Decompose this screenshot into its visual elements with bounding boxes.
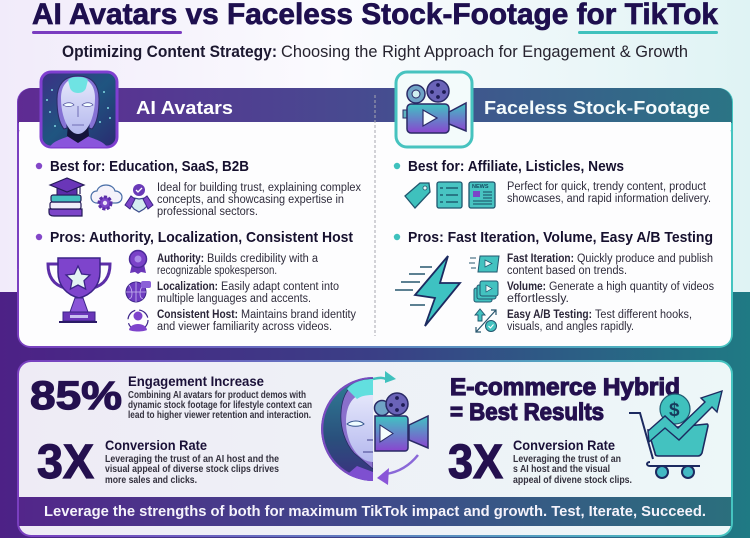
- text: conversion rate right: [513, 437, 632, 486]
- text: engagement increase: Combining AI avatars for product demos with: [128, 390, 306, 401]
- text: consistent host: Consistent Host:: [157, 309, 238, 321]
- icon: numbered list: [437, 182, 462, 208]
- heading: Faceless Stock-Footage: Faceless Stock-Footage: [484, 98, 710, 118]
- icon: trophy: [48, 258, 110, 323]
- subtitle: Choosing the Right Approach for Engagement & Growth: [281, 43, 688, 61]
- text: conversion rate right: appeal of divene stock clips.: [513, 475, 632, 486]
- heading: AI Avatars: AI Avatars: [136, 98, 233, 118]
- text: conversion rate right: Conversion Rate: [513, 437, 615, 453]
- text: localization: Localization:: [157, 281, 218, 293]
- icon: hybrid avatar and camera: [321, 371, 428, 485]
- text: authority: [157, 253, 319, 277]
- text: faceless best for description: showcases, and rapid information delivery.: [507, 193, 711, 205]
- section: faceless best for: Best for: Affiliate, Listicles, News: [408, 158, 624, 175]
- text: conversion rate left: visual appeal of diverse stock clips drives: [105, 464, 279, 475]
- text: volume: Volume:: [507, 281, 546, 293]
- text: fast iteration: [507, 253, 713, 277]
- icon: newspaper: NEWS: [472, 184, 489, 190]
- icon: A/B testing: [475, 309, 496, 332]
- text: engagement increase: lead to higher viewer retention and interaction.: [128, 410, 311, 421]
- icon: AI avatar: [41, 72, 117, 147]
- text: easy A/B testing: Easy A/B Testing:: [507, 309, 592, 321]
- text: conversion rate left: [105, 437, 279, 486]
- text: conversion rate left: Conversion Rate: [105, 437, 207, 453]
- heading: e-commerce hybrid: E-commerce Hybrid: [450, 374, 680, 401]
- section: faceless pros: Pros: Fast Iteration, Volume, Easy A/B Testing: [408, 229, 713, 246]
- banner: [19, 497, 731, 526]
- icon: fast video: [469, 256, 499, 272]
- icon: handshake: [125, 184, 153, 212]
- panel: comparison: [17, 72, 733, 348]
- text: AI best for description: professional sectors.: [157, 206, 258, 218]
- section: AI pros: Pros: Authority, Localization, Consistent Host: [50, 229, 353, 246]
- text: engagement increase: dynamic stock footage for lifestyle context can: [128, 400, 312, 411]
- text: consistent host: and viewer familiarity across videos.: [157, 321, 332, 333]
- icon: consistent host: [128, 310, 148, 332]
- text: easy A/B testing: Test different hooks,: [595, 309, 692, 321]
- text: authority: Builds credibility with a: [207, 253, 319, 265]
- text: faceless best for description: [507, 181, 711, 205]
- icon: stacked videos: [474, 281, 498, 302]
- text: volume: Generate a high quantity of videos: [549, 281, 714, 293]
- stat: 85%: 85%: [30, 374, 122, 418]
- text: fast iteration: Fast Iteration:: [507, 253, 574, 265]
- text: AI best for description: concepts, and showcasing expertise in: [157, 194, 344, 206]
- icon: cloud gear: [91, 185, 122, 209]
- icon: video camera: [396, 72, 472, 147]
- subtitle: Optimizing Content Strategy:: [62, 43, 277, 61]
- section: AI best for: Best for: Education, SaaS, B2B: [50, 158, 249, 175]
- text: engagement increase: Engagement Increase: [128, 373, 264, 389]
- icon: authority badge: [130, 250, 146, 274]
- icon: lightning bolt: [395, 256, 460, 326]
- header bar: [18, 88, 732, 123]
- text: easy A/B testing: visuals, and angles rapidly.: [507, 321, 634, 333]
- icon: shopping cart with rising arrow: [629, 391, 722, 478]
- panel: results: [17, 360, 733, 537]
- text: engagement increase: [128, 373, 312, 421]
- stat: 3X left: 3X: [37, 436, 94, 489]
- icon: graduation books: [49, 178, 84, 216]
- text: faceless best for description: Perfect for quick, trendy content, product: [507, 181, 707, 193]
- text: localization: Easily adapt content into: [221, 281, 339, 293]
- icon: price tag: [405, 183, 430, 208]
- text: conversion rate right: Leveraging the trust of an: [513, 454, 621, 465]
- banner: Leverage the strengths of both for maximum TikTok impact and growth. Test, Iterate, Succeed.: [44, 503, 706, 520]
- text: consistent host: Maintains brand identity: [241, 309, 356, 321]
- text: easy A/B testing: [507, 309, 692, 333]
- text: fast iteration: Quickly produce and publish: [577, 253, 713, 265]
- subtitle: [62, 43, 688, 61]
- text: authority: Authority:: [157, 253, 204, 265]
- icon: globe: [126, 281, 151, 302]
- icon: shopping cart with rising arrow: $: [669, 400, 680, 421]
- text: authority: recognizable spokesperson.: [157, 265, 277, 277]
- heading: e-commerce hybrid: [450, 374, 680, 426]
- icon: newspaper: [469, 182, 495, 208]
- text: fast iteration: content based on trends.: [507, 265, 627, 277]
- text: conversion rate left: more sales and clicks.: [105, 475, 197, 486]
- text: volume: effortlessly.: [507, 293, 569, 305]
- text: conversion rate left: Leveraging the trust of an AI host and the: [105, 454, 279, 465]
- text: consistent host: [157, 309, 356, 333]
- text: localization: multiple languages and accents.: [157, 293, 311, 305]
- text: AI best for description: Ideal for building trust, explaining complex: [157, 182, 361, 194]
- stat: 3X right: 3X: [448, 436, 503, 489]
- text: localization: [157, 281, 339, 305]
- text: conversion rate right: s AI host and the visual: [513, 464, 610, 475]
- heading: e-commerce hybrid: = Best Results: [450, 399, 604, 426]
- text: AI best for description: [157, 182, 361, 218]
- text: volume: [507, 281, 714, 305]
